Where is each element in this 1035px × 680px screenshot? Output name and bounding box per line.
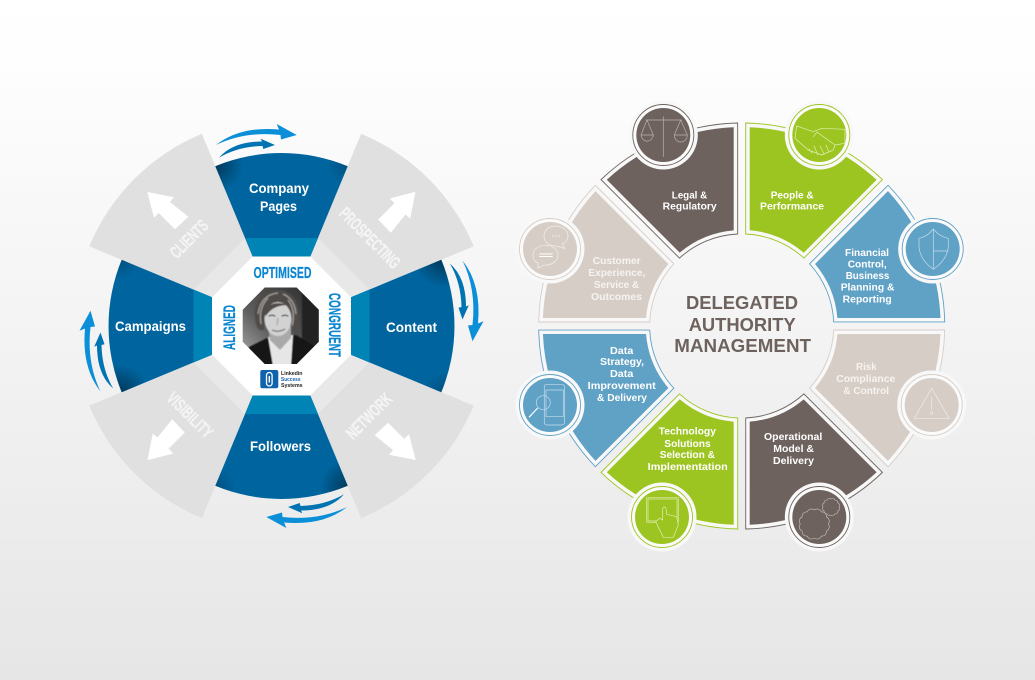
icon: phone and magnifier (516, 370, 584, 440)
label: optimised: OPTIMISED (254, 265, 312, 282)
wedge: customer experience (539, 185, 674, 322)
grey segments (78, 123, 485, 529)
centre title: MANAGEMENT (674, 335, 812, 356)
segment: company pages (215, 153, 348, 256)
logo: linkedin success systems: Linkedin (281, 371, 302, 377)
label: visibility: VISIBILITY (163, 388, 217, 442)
curved arrows (80, 124, 484, 528)
text: technology: Implementation (648, 462, 728, 473)
text: people: People & (771, 190, 814, 201)
text: data: Data (610, 369, 634, 380)
wedge: people and performance (746, 123, 882, 258)
segment: content (351, 260, 454, 392)
label: campaigns: Campaigns (115, 319, 186, 334)
wedge: technology solutions (601, 394, 738, 529)
grey segment labels (163, 203, 405, 443)
logo: linkedin success systems: Systems (281, 383, 303, 389)
segment: clients (78, 123, 289, 333)
segment: visibility (78, 319, 289, 529)
arrow: prospecting (378, 192, 416, 233)
icon: speech bubbles (516, 214, 584, 284)
icon: shield (898, 214, 967, 284)
icon badges (516, 100, 967, 552)
text: data: Improvement (588, 381, 656, 392)
wedges (499, 83, 985, 569)
arrow: clients (147, 192, 188, 229)
text: technology: Selection & (660, 450, 716, 461)
segment: network (274, 319, 485, 529)
text: legal: Legal & (672, 190, 708, 201)
text: financial: Business (846, 271, 890, 282)
segment: prospecting (274, 123, 485, 333)
text: operational: Operational (764, 432, 822, 443)
wedge: financial control (793, 185, 985, 377)
label: company pages: Company (249, 181, 309, 196)
label: network: NETWORK (342, 389, 396, 443)
arrow: network (375, 423, 416, 460)
centre title: AUTHORITY (689, 314, 796, 335)
text: people: Performance (760, 201, 824, 212)
blue segment labels (115, 181, 437, 454)
arrow: visibility (148, 419, 185, 460)
text: legal: Regulatory (663, 201, 717, 212)
segment: followers (215, 396, 348, 499)
text: customer: Customer (593, 256, 641, 267)
text: financial: Planning & (841, 283, 895, 294)
text: operational: Model & (773, 444, 815, 455)
label: company pages: Pages (260, 199, 297, 214)
right wheel (499, 83, 985, 569)
text: data: Data (610, 346, 634, 357)
label: congruent: CONGRUENT (325, 293, 344, 357)
icon: handshake (785, 100, 854, 170)
text: financial: Reporting (843, 295, 892, 306)
arrows: right (450, 260, 484, 341)
portrait photo (242, 287, 320, 366)
label: prospecting: PROSPECTING (335, 203, 405, 273)
arrows: bottom (266, 494, 347, 528)
text: data: & Delivery (597, 393, 647, 404)
icon: warning triangle (897, 370, 966, 440)
text: risk: Compliance (836, 374, 896, 385)
blue segments (109, 153, 454, 499)
left wheel (78, 123, 485, 529)
text: technology: Technology (659, 427, 716, 438)
white block arrows (147, 192, 416, 460)
label: content: Content (386, 320, 437, 335)
text: financial: Financial (845, 248, 889, 259)
text: customer: Experience, (588, 268, 645, 279)
icon: scales (629, 100, 698, 170)
icon: gears (785, 482, 854, 552)
text: customer: Outcomes (591, 292, 642, 303)
text: risk: & Control (843, 386, 889, 397)
centre title: DELEGATED (686, 292, 798, 313)
wedge: legal and regulatory (601, 83, 793, 275)
arrows: top (216, 124, 297, 158)
centre title (674, 292, 812, 356)
text: customer: Service & (594, 280, 640, 291)
wedge labels (588, 190, 896, 473)
arrows: left (80, 311, 113, 392)
centre octagon (212, 256, 351, 396)
wedge: risk compliance (810, 330, 945, 467)
wedge: data strategy (499, 275, 691, 467)
text: data: Strategy, (600, 357, 644, 368)
label: clients: CLIENTS (166, 216, 212, 262)
label: aligned: ALIGNED (220, 305, 239, 350)
text: technology: Solutions (664, 439, 711, 450)
wedge: operational model (690, 377, 882, 569)
text: operational: Delivery (773, 456, 814, 467)
text: risk: Risk (856, 362, 877, 373)
logo: linkedin success systems (260, 370, 303, 389)
icon: tablet touch (628, 482, 696, 552)
text: financial: Control, (848, 260, 887, 271)
octagon labels (220, 265, 344, 357)
logo: linkedin success systems: Success (281, 377, 301, 383)
segment: campaigns (109, 260, 212, 392)
label: followers: Followers (250, 439, 311, 454)
